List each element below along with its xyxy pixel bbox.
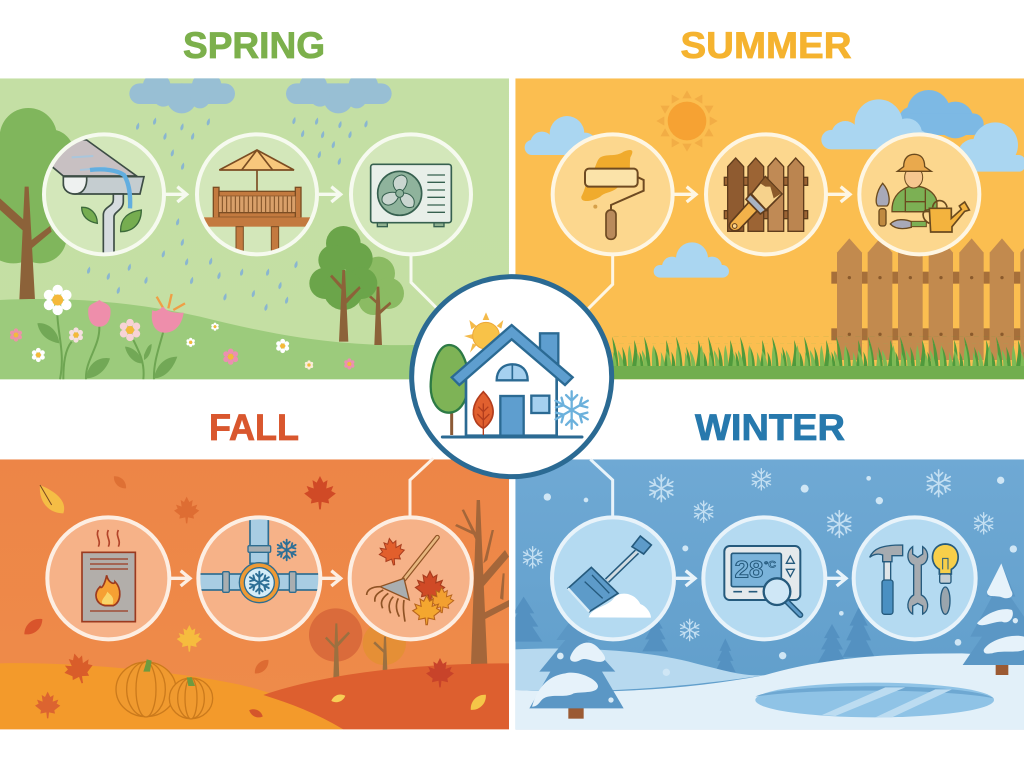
step circle: deck and patio bbox=[197, 134, 317, 257]
center emblem: house in seasons bbox=[412, 277, 612, 477]
step circle: raking leaves bbox=[350, 517, 472, 639]
frozen pond bbox=[755, 683, 994, 717]
fall scene bbox=[0, 459, 509, 729]
panel: spring bbox=[0, 72, 509, 379]
arrow bbox=[322, 571, 341, 586]
title: fall: FALL bbox=[209, 407, 299, 448]
step circle: gutter bbox=[40, 133, 164, 257]
title: winter: WINTER bbox=[695, 407, 845, 448]
step circle: fence staining bbox=[706, 134, 826, 254]
arrow bbox=[828, 187, 850, 202]
icon: tree bbox=[431, 345, 469, 435]
step circle: furnace bbox=[47, 517, 169, 639]
step circle: repair tools bbox=[854, 517, 976, 639]
arrow bbox=[166, 187, 187, 202]
icon: autumn leaf bbox=[473, 392, 493, 435]
step circle: snow shovel bbox=[552, 517, 674, 639]
panel: summer bbox=[515, 78, 1024, 379]
arrow bbox=[171, 571, 190, 586]
thermostat reading: 28 bbox=[735, 556, 763, 583]
summer scene bbox=[515, 78, 1024, 379]
spring scene bbox=[0, 72, 509, 379]
step circle: thermostat bbox=[703, 517, 825, 639]
arrow bbox=[674, 187, 696, 202]
connector: spring to house bbox=[411, 255, 437, 309]
panel: fall bbox=[0, 458, 509, 729]
step circle: paint roller bbox=[553, 134, 673, 254]
arrow bbox=[319, 187, 341, 202]
title: summer: SUMMER bbox=[680, 25, 852, 66]
arrow bbox=[827, 571, 846, 586]
icon: sun bbox=[464, 312, 503, 353]
step circle: frozen pipes bbox=[197, 517, 322, 639]
thermostat unit: °C bbox=[764, 559, 776, 569]
step circle: gardening bbox=[859, 134, 979, 254]
connector: winter to house bbox=[590, 459, 613, 517]
title: spring: SPRING bbox=[183, 25, 325, 66]
icon: snowflake bbox=[553, 391, 591, 429]
panel: winter bbox=[505, 459, 1024, 729]
icon: house bbox=[452, 325, 573, 436]
connector: fall to house bbox=[410, 458, 433, 517]
connector: summer to house bbox=[587, 255, 613, 310]
step circle: air conditioner bbox=[351, 134, 471, 254]
arrow bbox=[676, 571, 695, 586]
ground line bbox=[442, 432, 582, 441]
winter scene bbox=[505, 459, 1024, 729]
